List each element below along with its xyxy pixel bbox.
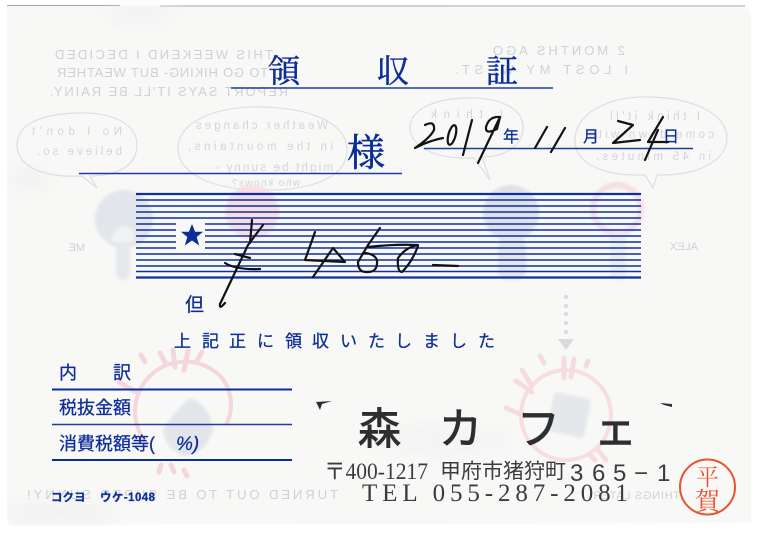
ruled amount box — [136, 194, 641, 278]
red personal seal: 平 — [696, 465, 719, 490]
heads and bodies of the figures — [95, 185, 641, 280]
shop name stamp: 森カフェ — [358, 406, 637, 454]
form maker code: コクヨ — [51, 491, 86, 504]
proviso label: 但 — [185, 294, 204, 316]
balloon text: who knows? — [232, 178, 301, 189]
handwritten date — [415, 117, 668, 163]
balloon text: in 45 minutes. — [596, 151, 711, 163]
table row: breakdown heading: 内訳 — [59, 363, 131, 383]
address — [324, 459, 670, 487]
mirrored story text, top right: I LOST MY WEST. — [455, 62, 628, 77]
addressee line: 様 — [347, 133, 385, 175]
mirrored name labels: ALEX — [669, 241, 698, 253]
mirrored story text, top left: THIS WEEKEND I DECIDED — [55, 47, 273, 62]
mirrored story text, top right — [455, 43, 628, 77]
form maker code: ウケ-1048 — [100, 491, 156, 504]
table row: consumption tax: 消費税額等( — [59, 434, 155, 454]
balloon text: I think it'll — [610, 111, 700, 123]
address: 〒400-1217 — [324, 459, 428, 484]
title: receipt: 領収証 — [268, 53, 518, 89]
red burst circle and square, lower right — [506, 356, 611, 460]
form maker code — [51, 491, 156, 504]
telephone number: TEL 055-287-2081 — [362, 480, 628, 507]
balloon text: might be sunny - — [215, 162, 333, 174]
table row: consumption tax — [52, 434, 292, 460]
table row: amount before tax: 税抜金額 — [59, 398, 131, 418]
mirrored story text, top left — [50, 47, 288, 99]
date line: 日 — [663, 129, 679, 146]
mirrored name labels: ME — [68, 242, 85, 254]
mirrored caption at bottom: TURNED OUT TO BE SUPER SUNNY! — [27, 487, 338, 502]
balloon text: believe so. — [37, 146, 122, 158]
dotted arrow — [558, 295, 574, 350]
red personal seal: 賀 — [695, 488, 722, 516]
breakdown table — [52, 363, 292, 460]
date line — [424, 128, 693, 148]
address: 甲府市猪狩町 — [440, 460, 566, 483]
balloon text: No I don't — [31, 126, 122, 138]
red burst circle, lower left — [119, 350, 231, 476]
red personal seal — [680, 460, 735, 516]
table row: consumption tax: %) — [176, 434, 199, 455]
balloon text — [31, 109, 714, 189]
balloon text: I think — [431, 109, 503, 121]
mirrored caption at bottom — [27, 487, 680, 502]
balloon text: Weather changes — [196, 120, 328, 132]
mirrored caption at bottom: THINGS LATER — [593, 490, 680, 502]
mirrored story text, top left: REPORT SAYS IT'LL BE RAINY. — [50, 84, 288, 99]
date line: 年 — [503, 128, 519, 146]
crop marks — [316, 401, 672, 410]
star mark — [176, 221, 205, 251]
date line: 月 — [583, 129, 599, 146]
speech balloons — [17, 97, 727, 190]
handwritten amount — [220, 220, 458, 307]
mirrored story text, top right: 2 MONTHS AGO — [493, 43, 625, 58]
balloon text: in the mountains, — [188, 141, 333, 153]
received statement: 上記正に領収いたしました — [174, 332, 495, 351]
mirrored story text, top left: TO GO HIKING- BUT WEATHER — [57, 65, 268, 80]
balloon text: come down with — [589, 129, 714, 141]
address: 365−1 — [570, 460, 670, 487]
mirrored name labels — [68, 241, 698, 254]
